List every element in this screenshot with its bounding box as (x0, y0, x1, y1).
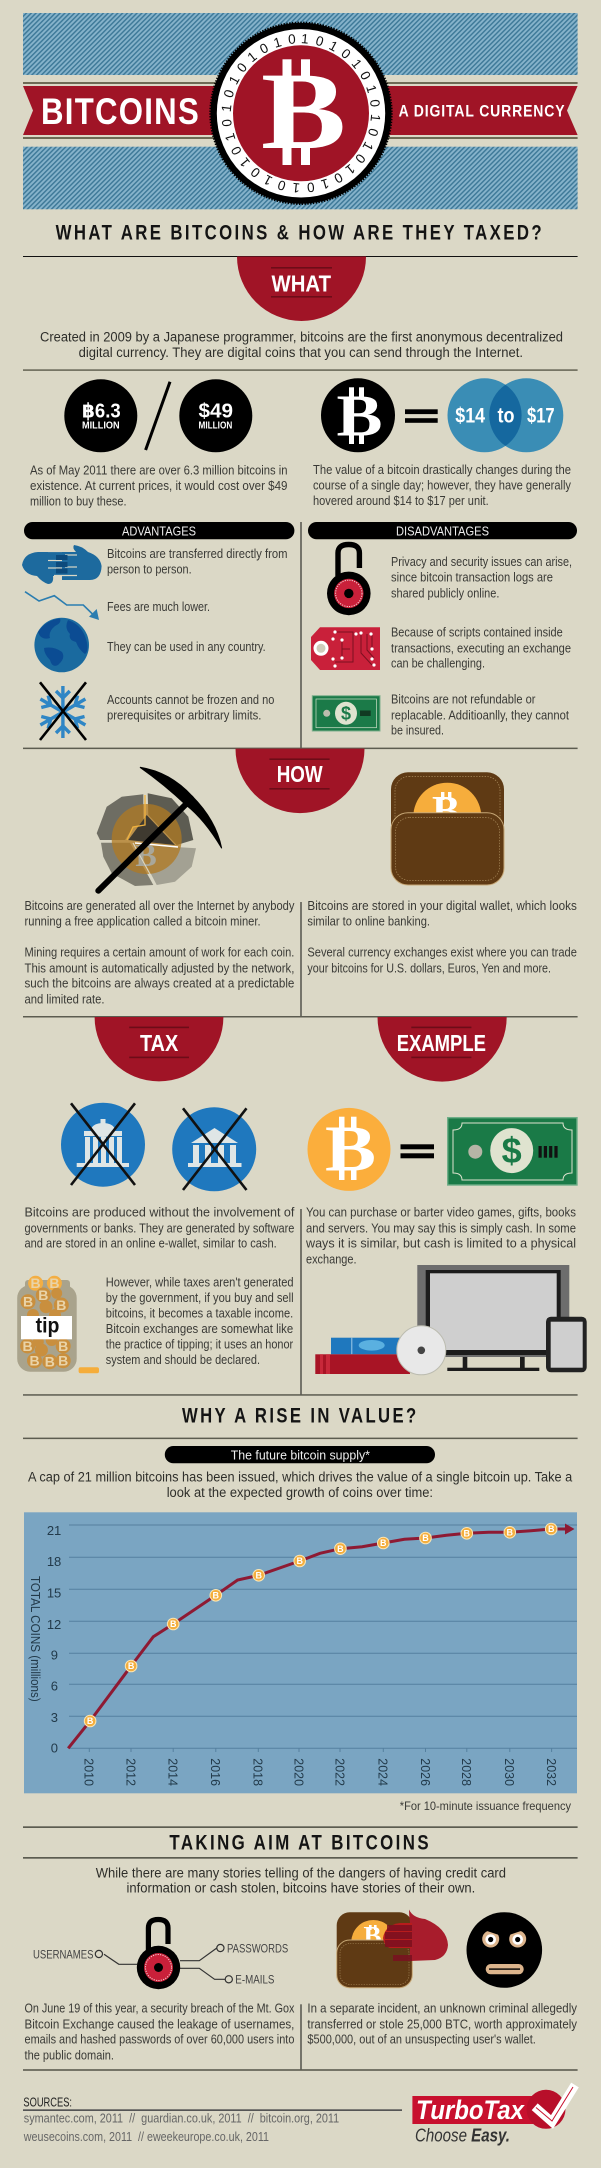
icon: media devices and books (315, 1265, 587, 1375)
text: mt gox breach: On June 19 of this year, a security breach of the Mt. Gox (24, 2002, 295, 2016)
coin markers: B (87, 1716, 94, 1726)
text: disadvantage 1: since bitcoin transaction logs are (391, 571, 553, 585)
stat: 49 million dollars: $49 (198, 401, 233, 423)
section tab: tax: TAX (140, 1030, 179, 1056)
coin markers: B (296, 1556, 303, 1566)
y axis labels: 6 (51, 1679, 58, 1694)
icon: pickaxe splitting a coin rock (97, 767, 222, 891)
text: how mining works: Mining requires a certain amount of work for each coin. (24, 946, 294, 960)
text: tax part 2: bitcoins, it becomes a taxable income. (106, 1306, 293, 1320)
disadvantages header: DISADVANTAGES (396, 524, 489, 538)
coin markers: B (170, 1619, 177, 1629)
text: tax part 2: by the government, if you buy and sell (106, 1291, 294, 1305)
icon: black bitcoin: B (336, 382, 382, 448)
heading: taking aim at bitcoins: TAKING AIM AT BITCOINS (169, 1831, 431, 1854)
y axis labels (47, 1523, 61, 1756)
x axis labels: 2030 (502, 1758, 517, 1786)
coin markers: B (255, 1570, 262, 1580)
coin markers: B (380, 1538, 387, 1548)
section tab: what: WHAT (272, 271, 331, 297)
y axis labels: 18 (47, 1554, 61, 1569)
text: how mining works: Bitcoins are generated all over the Internet by anybody (24, 899, 295, 913)
ribbon subtitle: A DIGITAL CURRENCY (399, 103, 565, 121)
text: how mining works: running a free application called a bitcoin miner. (24, 915, 261, 929)
text: disadvantage 2 (391, 626, 571, 671)
text: cap description: A cap of 21 million bitcoins has been issued, which drives the value of a single bitcoin up. Take a (28, 1470, 573, 1485)
text: example: You can purchase or barter video games, gifts, books (306, 1206, 576, 1220)
text: value stat: hovered around $14 to $17 per unit. (313, 494, 489, 508)
text: value stat: course of a single day; however, they have generally (313, 478, 572, 492)
icon: tip jar: B (23, 1338, 33, 1354)
text: mt gox breach (24, 2002, 295, 2062)
venn: value range: $17 (527, 405, 555, 428)
intro text: digital currency. They are digital coins that you can send through the Internet. (79, 345, 523, 360)
text: tax part 1: and are stored in an online e-wallet, similar to cash. (24, 1237, 277, 1251)
coin markers (84, 1523, 557, 1727)
icon: large banknote: $ (502, 1130, 522, 1171)
logo: turbotax: TurboTax (416, 2095, 525, 2125)
icon: tip jar: B (58, 1353, 68, 1369)
section tab: what (237, 256, 366, 321)
section tab: example: EXAMPLE (397, 1030, 486, 1056)
text: tax part 1 (24, 1206, 295, 1251)
text: disadvantage 3 (391, 693, 569, 738)
x axis labels: 2020 (291, 1758, 306, 1786)
venn: value range: to (498, 405, 514, 428)
stat: 6.3 million bitcoins: ฿6.3 (82, 401, 121, 423)
text: cap description: look at the expected growth of coins over time: (167, 1485, 433, 1500)
text: stolen btc incident: $500,000, out of an unsuspecting user's wallet. (307, 2033, 536, 2047)
x axis labels: 2012 (123, 1758, 138, 1786)
section tab: tax (95, 1017, 223, 1081)
text: cap description (28, 1470, 573, 1500)
coin markers: B (464, 1528, 471, 1538)
icon: padlock with leak labels (33, 1920, 288, 1989)
coin emblem: 10101010101010101010101010101010 (222, 34, 380, 192)
equals sign (405, 409, 438, 423)
icon: falling fees arrow (25, 592, 99, 620)
icon: hands (22, 545, 102, 584)
supply curve (68, 1524, 574, 1748)
text: stolen btc incident (307, 2002, 578, 2047)
coin markers: B (337, 1544, 344, 1554)
text: stolen btc incident: transferred or stole 25,000 BTC, worth approximately (307, 2017, 578, 2031)
icon: tip jar: B (38, 1287, 48, 1303)
icon: crossed out snowflake (37, 682, 89, 740)
section tab: example (378, 1017, 507, 1082)
advantages header: ADVANTAGES (122, 524, 196, 538)
text: tax part 2: the practice of tipping; it uses an honor (106, 1337, 293, 1351)
text: tax part 1: governments or banks. They are generated by software (24, 1221, 294, 1235)
heading: why a rise in value: WHY A RISE IN VALUE? (182, 1405, 418, 1428)
icon: orange bitcoin (308, 1108, 390, 1191)
x axis labels: 2016 (208, 1758, 223, 1786)
icon: small banknote (312, 696, 380, 731)
icon: large banknote (448, 1118, 577, 1185)
text: value stat: The value of a bitcoin drastically changes during the (313, 463, 571, 477)
disc (397, 1326, 446, 1375)
text: example: ways it is similar, but cash is limited to a physical (305, 1237, 576, 1251)
text: mt gox breach: emails and hashed passwords of over 60,000 users into (24, 2033, 294, 2047)
coin markers: B (128, 1661, 135, 1671)
text: how wallets work (307, 899, 577, 975)
text: tax part 2: system and should be declared. (106, 1353, 260, 1367)
x axis labels: 2024 (376, 1758, 391, 1786)
icon: tip jar: B (58, 1338, 68, 1354)
text: advantage 1 (107, 547, 288, 577)
slash divider (146, 382, 170, 450)
text: stolen btc incident: In a separate incident, an unknown criminal allegedly (307, 2002, 578, 2016)
text: example (305, 1206, 576, 1266)
x axis labels: 2022 (332, 1758, 347, 1786)
striped band: bottom (23, 147, 578, 209)
text: how mining works: This amount is automatically adjusted by the network, (24, 961, 294, 975)
text: tax part 2: Bitcoin exchanges are somewhat like (106, 1322, 293, 1336)
text: taking aim intro (96, 1865, 506, 1896)
icon: hand taking from wallet (337, 1910, 448, 1988)
y axis labels: 12 (47, 1617, 61, 1632)
text: value stat (313, 463, 572, 508)
icon: tip jar: B (23, 1294, 33, 1310)
text: tax part 1: Bitcoins are produced without the involvement of (24, 1206, 295, 1220)
x axis labels: 2018 (251, 1758, 266, 1786)
text: disadvantage 3: replacable. Additioanlly, they cannot (391, 708, 569, 722)
x axis labels (82, 1758, 559, 1786)
icon: crossed out bank (172, 1107, 256, 1191)
x axis labels: 2028 (459, 1758, 474, 1786)
coin markers: B (507, 1528, 514, 1538)
line chart: bitcoin supply (24, 1512, 577, 1793)
text: example: and servers. You may say this is simply cash. In some (306, 1221, 576, 1235)
icon: circuit price tag (311, 627, 380, 670)
sources: weusecoins.com, 2011 // eweekeurope.co.uk, 2011 (23, 2129, 269, 2144)
y axis labels: 15 (47, 1585, 61, 1600)
text: how wallets work: your bitcoins for U.S. dollars, Euros, Yen and more. (307, 961, 551, 975)
text: taking aim intro: information or cash stolen, bitcoins have stories of their own. (126, 1881, 475, 1896)
text: disadvantage 1: shared publicly online. (391, 586, 499, 600)
icon: padlock (327, 544, 371, 615)
equals sign (400, 1144, 434, 1158)
y axis labels: 9 (51, 1647, 58, 1662)
text: advantage 4 (107, 693, 274, 722)
text: tax part 2 (106, 1275, 294, 1367)
text: how wallets work: similar to online banking. (307, 915, 430, 929)
text: advantage 2: Fees are much lower. (107, 600, 210, 614)
text: supply stat: million to buy these. (30, 495, 126, 509)
header banner (23, 13, 578, 210)
stat: 49 million dollars: MILLION (198, 420, 232, 431)
icon: pickaxe splitting a coin rock: B (135, 837, 157, 873)
icon: hand taking from wallet: B (363, 1921, 382, 1951)
coin markers: B (548, 1524, 555, 1534)
coin markers: B (422, 1533, 429, 1543)
text: disadvantage 1: Privacy and security issues can arise, (391, 555, 572, 569)
y axis labels: 3 (51, 1710, 58, 1725)
text: example: exchange. (306, 1252, 356, 1266)
text: disadvantage 3: Bitcoins are not refundable or (391, 693, 535, 707)
label: e-mails: E-MAILS (235, 1972, 274, 1986)
logo: turbotax (412, 2085, 575, 2146)
label: passwords: PASSWORDS (227, 1942, 288, 1956)
text: taking aim intro: While there are many stories telling of the dangers of having credit card (96, 1865, 506, 1880)
section tab: how: HOW (277, 761, 323, 787)
sources (23, 2096, 402, 2144)
y axis title: TOTAL COINS (millions) (28, 1576, 42, 1702)
chart footnote: *For 10-minute issuance frequency (400, 1799, 571, 1813)
intro text (40, 330, 563, 360)
text: supply stat (30, 463, 288, 509)
icon: tip jar: B (45, 1354, 55, 1370)
coin markers: B (213, 1590, 220, 1600)
icon: tip jar (17, 1275, 99, 1373)
chart title pill (165, 1446, 435, 1463)
text: disadvantage 1 (391, 555, 572, 600)
icon: wallet with bitcoin (391, 772, 504, 885)
icon: tip jar: B (29, 1353, 40, 1369)
venn: value range: $14 (455, 405, 485, 428)
books (315, 1338, 410, 1374)
y axis labels: 0 (51, 1741, 58, 1756)
text: advantage 4: prerequisites or arbitrary limits. (107, 708, 261, 722)
text: advantage 1: Bitcoins are transferred directly from (107, 547, 288, 561)
text: disadvantage 2: Because of scripts contained inside (391, 626, 563, 640)
chart title pill: The future bitcoin supply* (231, 1448, 370, 1462)
icon: black bitcoin (321, 378, 395, 452)
striped band: top (23, 13, 578, 75)
text: advantage 1: person to person. (107, 563, 192, 577)
label: usernames: USERNAMES (33, 1948, 94, 1962)
icon: tip jar: B (56, 1297, 66, 1313)
x axis labels: 2032 (544, 1758, 559, 1786)
x axis labels: 2010 (82, 1758, 97, 1786)
coin emblem: B (261, 50, 346, 172)
text: how wallets work: Bitcoins are stored in your digital wallet, which looks (307, 899, 577, 913)
icon: orange bitcoin: B (325, 1112, 376, 1186)
logo: turbotax: Choose Easy. (415, 2126, 510, 2146)
sources: symantec.com, 2011 // guardian.co.uk, 2011 // bitcoin.org, 2011 (24, 2111, 339, 2126)
text: how mining works: and limited rate. (24, 992, 104, 1006)
monitor (417, 1265, 569, 1371)
text: supply stat: As of May 2011 there are over 6.3 million bitcoins in (30, 463, 288, 477)
sources: SOURCES: (23, 2096, 72, 2110)
icon: tip jar: tip (36, 1315, 59, 1338)
text: disadvantage 2: transactions, executing an exchange (391, 641, 571, 655)
icon: wallet with bitcoin: B (432, 789, 460, 835)
icon: tip jar: B (49, 1275, 59, 1291)
icon: crossed out government building (61, 1103, 145, 1187)
stat: 49 million dollars (179, 379, 252, 452)
text: mt gox breach: Bitcoin Exchange caused the leakage of usernames, (24, 2017, 294, 2031)
venn: value range (448, 378, 563, 452)
x axis labels: 2014 (166, 1758, 180, 1786)
icon: masked thief (466, 1912, 542, 1988)
text: supply stat: existence. At current prices, it would cost over $49 (30, 479, 288, 493)
text: disadvantage 3: be insured. (391, 724, 444, 738)
icon: globe (34, 618, 89, 672)
text: advantage 4: Accounts cannot be frozen and no (107, 693, 274, 707)
ribbon title: BITCOINS (41, 91, 200, 132)
text: advantage 3: They can be used in any country. (107, 640, 266, 654)
y axis labels: 21 (47, 1523, 61, 1538)
tablet (546, 1317, 587, 1372)
stat: 6.3 million bitcoins: MILLION (82, 420, 120, 431)
disadvantages header (308, 522, 577, 539)
advantages header (24, 522, 294, 539)
ribbon (23, 82, 578, 139)
x axis labels: 2026 (418, 1758, 433, 1786)
text: mt gox breach: the public domain. (24, 2048, 114, 2062)
icon: small banknote: $ (341, 704, 351, 724)
section tab: how (236, 749, 364, 813)
stat: 6.3 million bitcoins (64, 379, 137, 452)
text: how mining works: such the bitcoins are always created at a predictable (24, 977, 294, 991)
text: how mining works (24, 899, 295, 1006)
intro text: Created in 2009 by a Japanese programmer, bitcoins are the first anonymous decentralized (40, 330, 563, 345)
icon: tip jar: B (31, 1275, 41, 1291)
text: tax part 2: However, while taxes aren't generated (106, 1275, 294, 1289)
text: disadvantage 2: can be challenging. (391, 657, 485, 671)
